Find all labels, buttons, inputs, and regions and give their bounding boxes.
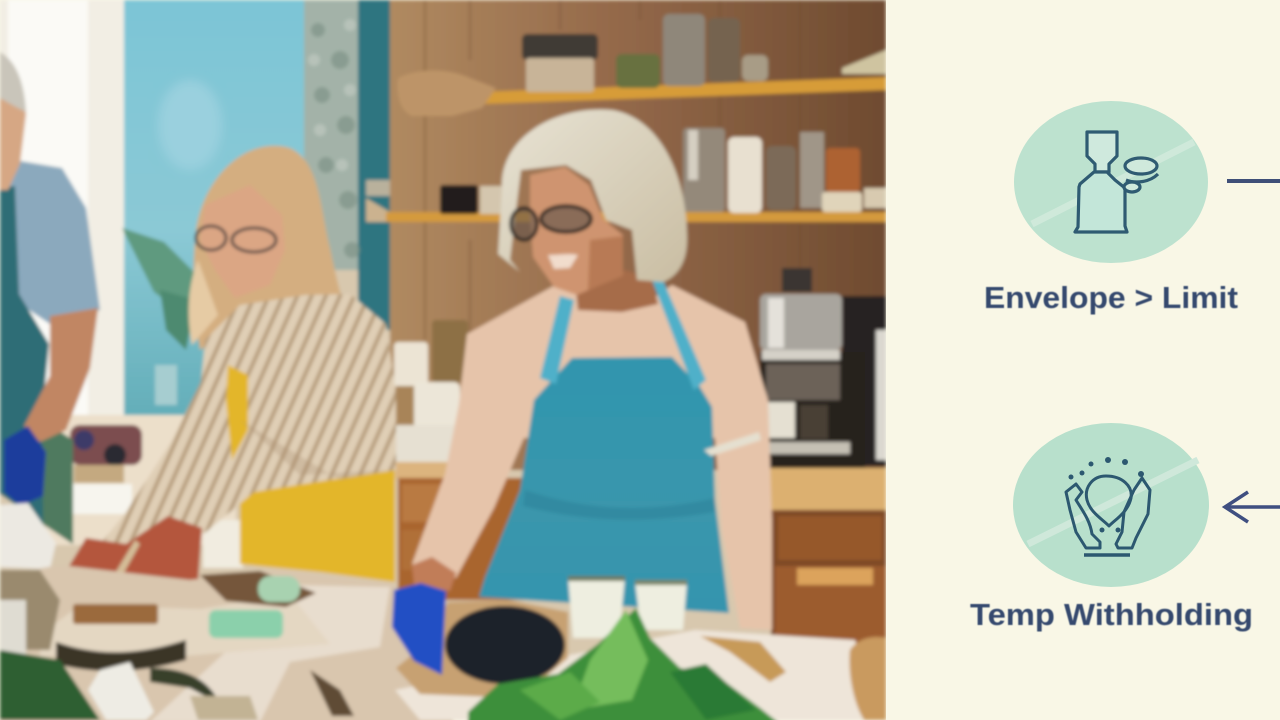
sweater	[102, 292, 398, 546]
houseplant	[122, 228, 196, 405]
photo background: wall and window	[0, 0, 772, 656]
node: temp withholding	[970, 423, 1253, 632]
hair	[498, 110, 687, 282]
foreground table	[0, 565, 886, 720]
circle badge: bottom	[1013, 423, 1209, 587]
face	[530, 167, 623, 295]
face	[204, 221, 281, 257]
bowl of blueberries	[392, 583, 568, 698]
circle badge: top	[1014, 101, 1208, 263]
label: Temp Withholding: Temp Withholding	[970, 597, 1253, 632]
photo background: wood wall	[390, 0, 886, 470]
right sleeve detail	[704, 432, 761, 456]
glasses	[511, 206, 591, 240]
apron body	[479, 357, 729, 613]
photo: kitchen scene with three cooks	[0, 0, 886, 720]
node: envelope over limit	[984, 101, 1238, 315]
yellow apron strap	[226, 365, 248, 460]
lower shelf	[366, 128, 886, 222]
gloved hand over bowl	[392, 583, 446, 675]
mouth	[548, 254, 578, 269]
hands	[68, 514, 204, 582]
yellow apron	[238, 468, 398, 584]
icon: bulb with hands	[1066, 457, 1150, 555]
person: left man	[0, 52, 100, 569]
apron straps	[540, 278, 706, 390]
espresso machine	[760, 268, 886, 468]
table clutter behind: left side	[46, 415, 243, 568]
upper shelf	[397, 14, 886, 116]
left sleeve cuff and hand	[412, 557, 456, 591]
hair	[194, 146, 354, 350]
panel: right cream column	[886, 0, 1280, 720]
wooden bowl at right	[850, 637, 886, 720]
glasses	[196, 226, 276, 252]
arrow: line from top badge	[1227, 179, 1280, 183]
icon: bottle with cups	[1075, 132, 1158, 232]
wood grain	[424, 2, 471, 338]
sweater	[412, 284, 772, 630]
photo background: vine column	[304, 0, 394, 330]
wooden board	[700, 636, 786, 682]
counter items	[394, 320, 468, 463]
neck	[576, 270, 658, 312]
label: Envelope limit: Envelope > Limit	[984, 280, 1238, 315]
salad greens	[468, 608, 790, 720]
person: central woman	[412, 110, 772, 630]
person: blonde woman	[62, 146, 396, 594]
counter top and cabinets	[396, 462, 886, 648]
white cups	[568, 576, 687, 638]
arrow: into bottom badge	[1225, 492, 1280, 522]
